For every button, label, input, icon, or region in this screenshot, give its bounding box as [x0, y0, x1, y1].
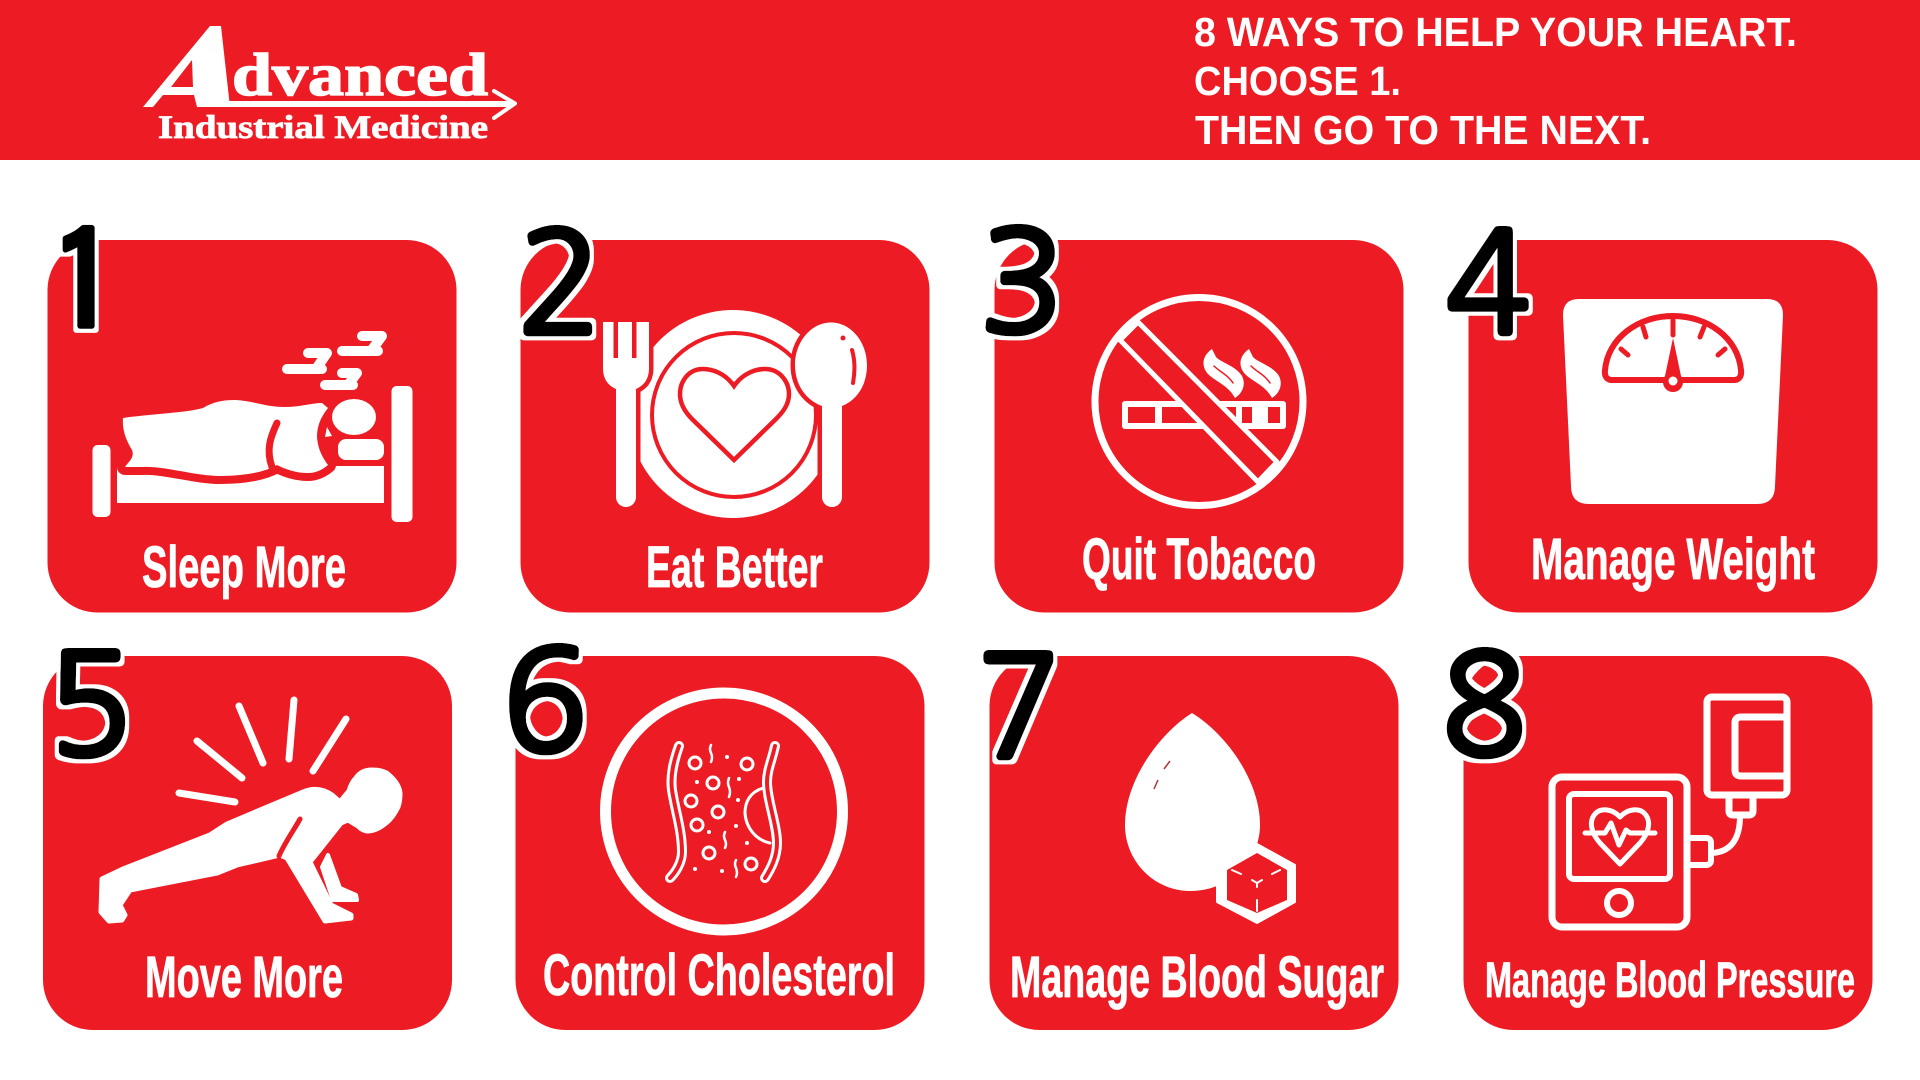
- icon: blood pressure monitor: [1552, 697, 1787, 927]
- panel: 1 sleep more: [48, 210, 456, 612]
- panel: 6 control cholesterol: [503, 632, 924, 1030]
- number 4: 4: [1446, 214, 1530, 354]
- panel: 5 move more: [43, 636, 452, 1030]
- label: Quit Tobacco: Quit Tobacco: [1082, 527, 1316, 592]
- header message: 8 WAYS TO HELP YOUR HEART.: [1194, 9, 1797, 55]
- header message: THEN GO TO THE NEXT.: [1195, 107, 1651, 153]
- icon: plate with heart, fork and spoon: [603, 310, 867, 518]
- panel: 7 manage blood sugar: [977, 638, 1398, 1030]
- label: Control Cholesterol: Control Cholesterol: [543, 943, 895, 1008]
- label: Eat Better: Eat Better: [646, 535, 823, 600]
- panel: 3 quit tobacco: [980, 213, 1404, 612]
- header message: CHOOSE 1.: [1194, 58, 1401, 104]
- icon: sleeping person in bed: [92, 336, 412, 522]
- icon: no smoking sign: [1095, 298, 1303, 506]
- logo: Advanced Industrial Medicine: Industrial Medicine: [158, 110, 488, 146]
- label: Move More: Move More: [145, 945, 343, 1010]
- panel: 8 manage blood pressure: [1442, 636, 1872, 1030]
- number 8: 8: [1442, 636, 1526, 776]
- logo: Advanced Industrial Medicine: dvanced: [232, 42, 488, 108]
- header banner: [0, 0, 1920, 160]
- icon: person doing push-up: [101, 700, 400, 921]
- label: Manage Blood Sugar: Manage Blood Sugar: [1010, 945, 1384, 1010]
- number 6: 6: [503, 632, 587, 772]
- logo: Advanced Industrial Medicine: [143, 26, 515, 146]
- number 5: 5: [48, 636, 132, 776]
- icon: blood drop with sugar cube: [1125, 713, 1295, 923]
- number 1: 1: [49, 210, 119, 350]
- panel: 2 eat better: [518, 214, 930, 612]
- number 3: 3: [980, 213, 1064, 353]
- number 7: 7: [977, 638, 1061, 778]
- panel: 4 manage weight: [1446, 214, 1878, 612]
- icon: artery with cholesterol plaque in circle: [606, 693, 842, 930]
- header message: [1194, 9, 1797, 153]
- icon: weighing scale: [1563, 299, 1783, 504]
- number 2: 2: [518, 214, 602, 354]
- label: Sleep More: Sleep More: [142, 535, 346, 600]
